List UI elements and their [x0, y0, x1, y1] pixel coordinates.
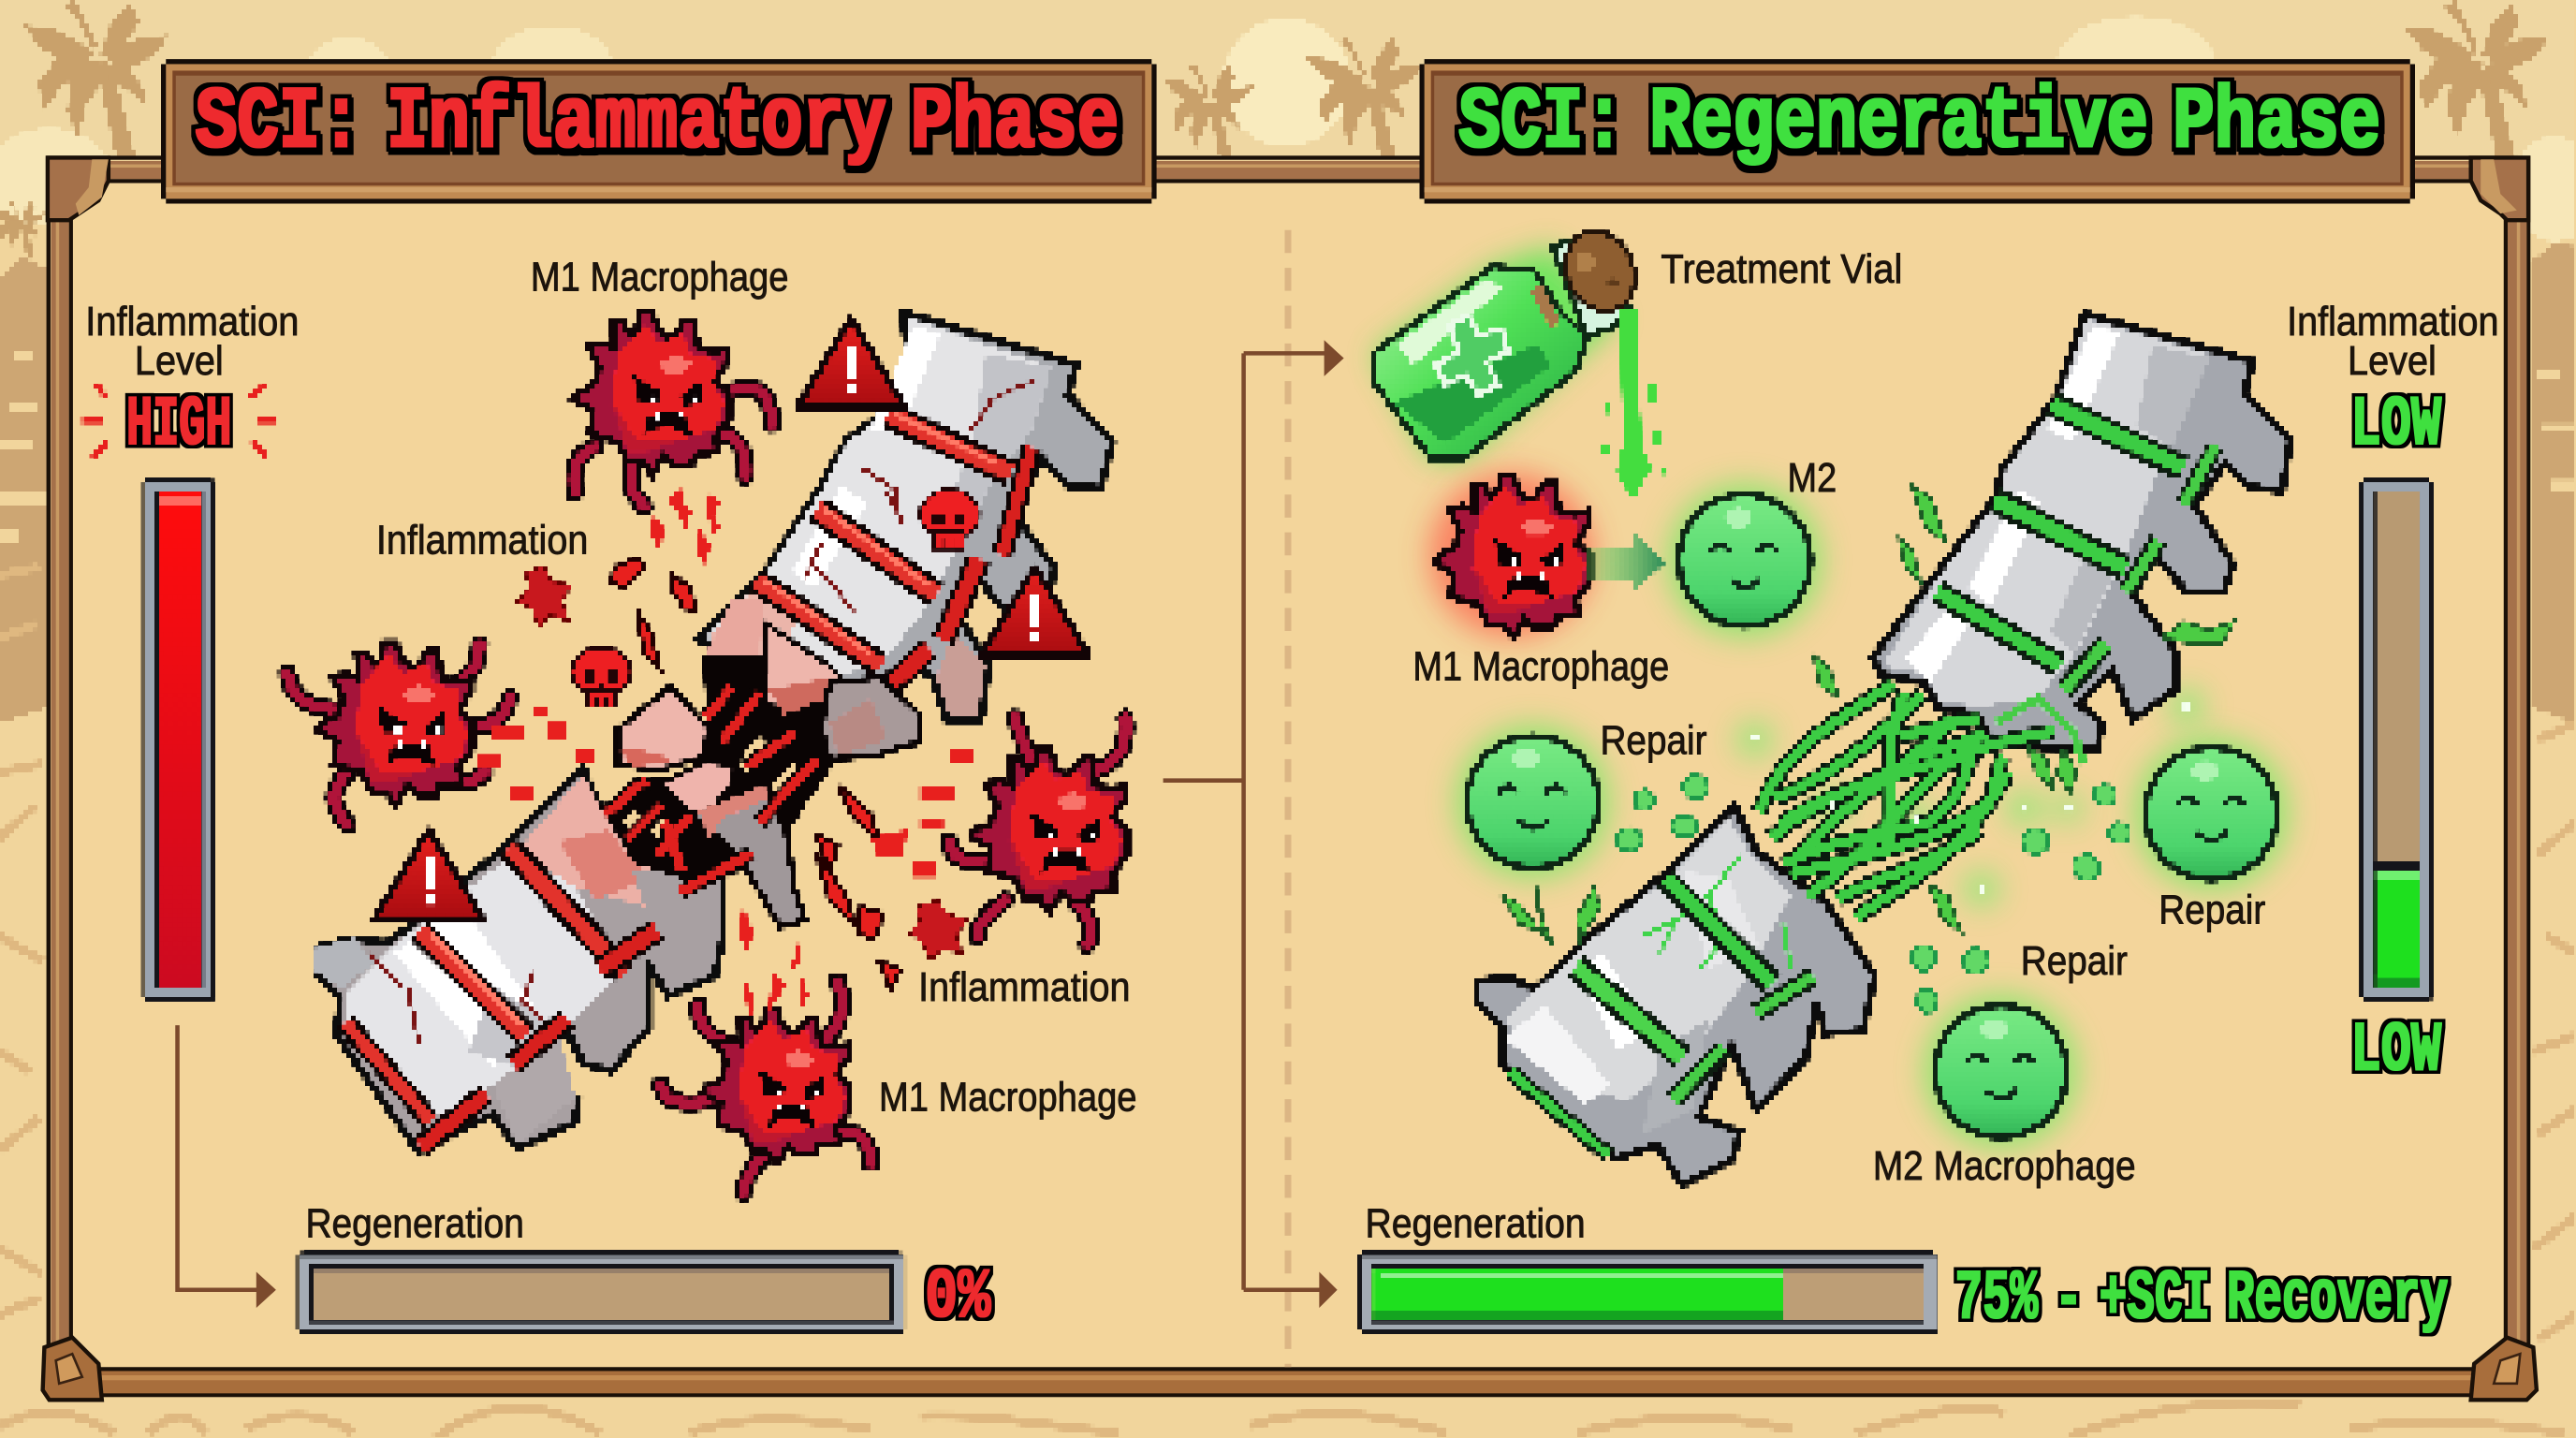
- icon: treatment vial: [1373, 220, 1647, 459]
- damaged spine lower section: [315, 769, 723, 1152]
- value: 0 percent: 0%: [925, 1257, 991, 1338]
- healed spine lower section: [1477, 807, 1875, 1184]
- inflammation level bar: full red: [143, 477, 215, 1003]
- label: treatment vial: Treatment Vial: [1661, 246, 1902, 292]
- label: inflammation level: [2287, 299, 2499, 384]
- label: inflammation right: Inflammation: [918, 964, 1131, 1010]
- status: LOW top: LOW: [2351, 385, 2442, 465]
- severed nerve strands: [605, 687, 818, 892]
- label: regeneration: Regeneration: [305, 1201, 524, 1247]
- panel: regenerative phase: [1358, 220, 2499, 1340]
- icon: floating skull: [572, 648, 631, 707]
- soft glows: [1373, 246, 2289, 1149]
- M1 macrophage bottom: [661, 981, 871, 1193]
- label: repair center: Repair: [2021, 938, 2128, 984]
- repair slime left: [1467, 736, 1599, 868]
- repair slime right: [2145, 748, 2277, 879]
- icon: skull on spine: [920, 490, 979, 549]
- label: regeneration: Regeneration: [1365, 1201, 1586, 1247]
- label: inflammation level: [85, 299, 299, 384]
- label: inflammation level: Inflammation: [2287, 299, 2499, 345]
- repair particles: [1617, 775, 2130, 1012]
- icon: alarm rays around HIGH: [82, 385, 274, 457]
- M2 macrophage slime: [1936, 1005, 2067, 1137]
- fractured central vertebra: [607, 624, 920, 927]
- icon: warning triangles: [374, 318, 1090, 918]
- label: inflammation level: Inflammation: [85, 299, 299, 345]
- label: repair right: Repair: [2159, 887, 2265, 932]
- label: inflammation left: Inflammation: [376, 517, 588, 563]
- M1 macrophage converting: [1434, 475, 1590, 638]
- regrowing vine bridge: [1760, 683, 2054, 917]
- label: inflammation level: Level: [135, 338, 224, 384]
- M1 macrophage right: [949, 718, 1127, 945]
- label: repair left: Repair: [1600, 718, 1707, 764]
- title banner: regenerative phase: [1419, 59, 2415, 204]
- regeneration bar: 75 percent: [1358, 1251, 1939, 1336]
- green liquid stream: [1602, 309, 1666, 500]
- inflammation level bar: low: [2361, 477, 2433, 1003]
- M1 macrophage top: [574, 312, 772, 506]
- label: inflammation level: Level: [2348, 338, 2437, 384]
- arrow: M1 to M2: [1587, 533, 1666, 594]
- title banner: inflammatory phase: [161, 59, 1157, 204]
- label: M1 macrophage bottom: M1 Macrophage: [879, 1074, 1137, 1120]
- phase divider and connector arrows: [178, 230, 1344, 1367]
- status: LOW bottom: LOW: [2351, 1011, 2442, 1092]
- title banner: inflammatory phase: SCI: Inflammatory Phase: [196, 74, 1119, 172]
- M1 macrophage left: [287, 642, 509, 825]
- M2 slime: [1679, 494, 1810, 626]
- regeneration bar: empty: [298, 1251, 905, 1336]
- vine leaves: [1501, 487, 2234, 945]
- label: M2 macrophage: M2 Macrophage: [1873, 1143, 2136, 1189]
- damaged spine upper section: [698, 312, 1112, 720]
- label: M1 macrophage: M1 Macrophage: [1412, 644, 1669, 690]
- panel: inflammatory phase: [82, 255, 1137, 1338]
- healed spine upper section: [1873, 314, 2291, 764]
- inflammation particles: [476, 487, 973, 1019]
- label: M2: M2: [1788, 455, 1837, 501]
- status: HIGH: HIGH: [126, 385, 231, 465]
- label: M1 macrophage top: M1 Macrophage: [531, 255, 788, 301]
- sparkle points: [1751, 703, 2190, 892]
